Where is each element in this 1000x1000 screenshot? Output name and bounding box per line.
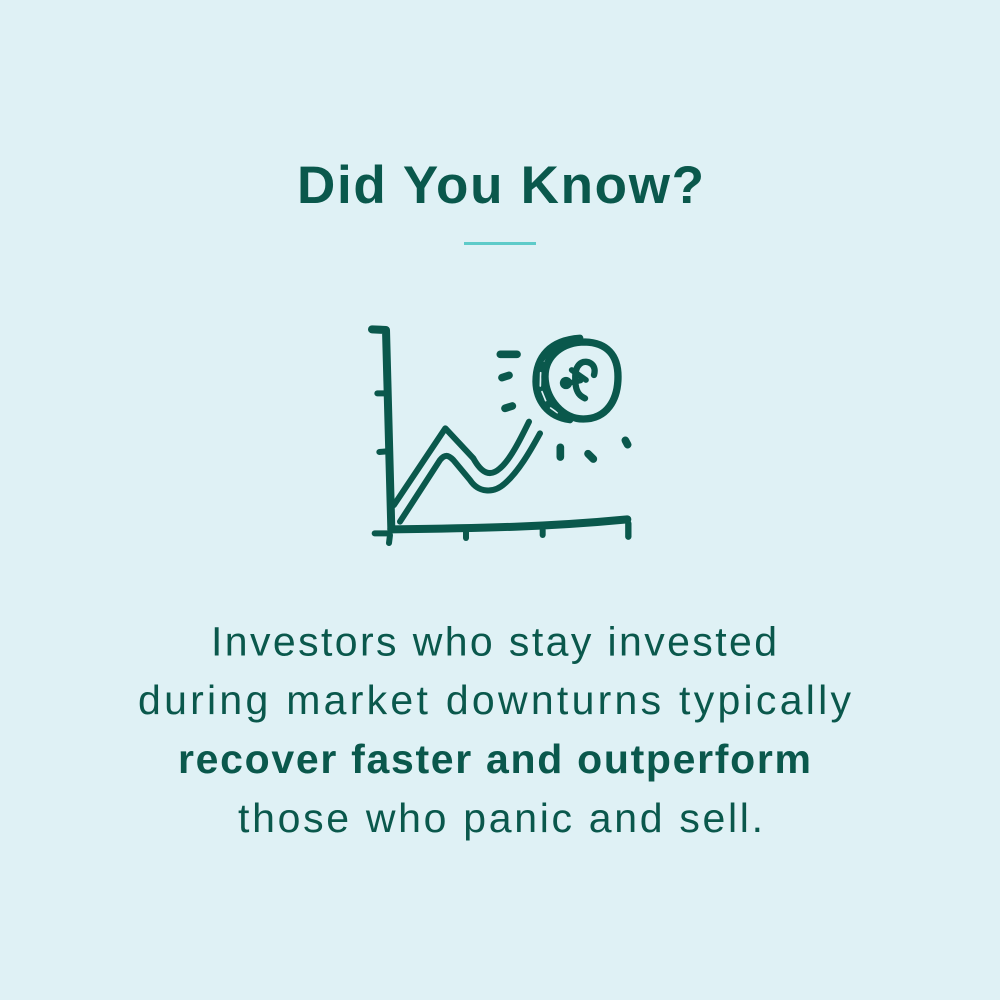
title underline bbox=[464, 242, 536, 245]
body text: Investors who stay invested bbox=[211, 618, 777, 664]
pound sign bbox=[563, 362, 595, 398]
motion dashes bbox=[500, 354, 628, 459]
body text: during market downturns typically bbox=[138, 677, 852, 723]
title: Did You Know? bbox=[297, 156, 704, 215]
body text bbox=[138, 618, 852, 841]
coin edge band bbox=[536, 338, 580, 420]
icon: rising chart with pound coin bbox=[372, 329, 628, 543]
body text: those who panic and sell. bbox=[238, 795, 763, 841]
pound coin bbox=[536, 338, 618, 420]
body text: recover faster and outperform bbox=[178, 736, 811, 782]
coin edge slits bbox=[540, 373, 557, 413]
coin face bbox=[545, 342, 618, 419]
chart double trend line bbox=[394, 422, 540, 522]
chart axes bbox=[372, 329, 628, 543]
